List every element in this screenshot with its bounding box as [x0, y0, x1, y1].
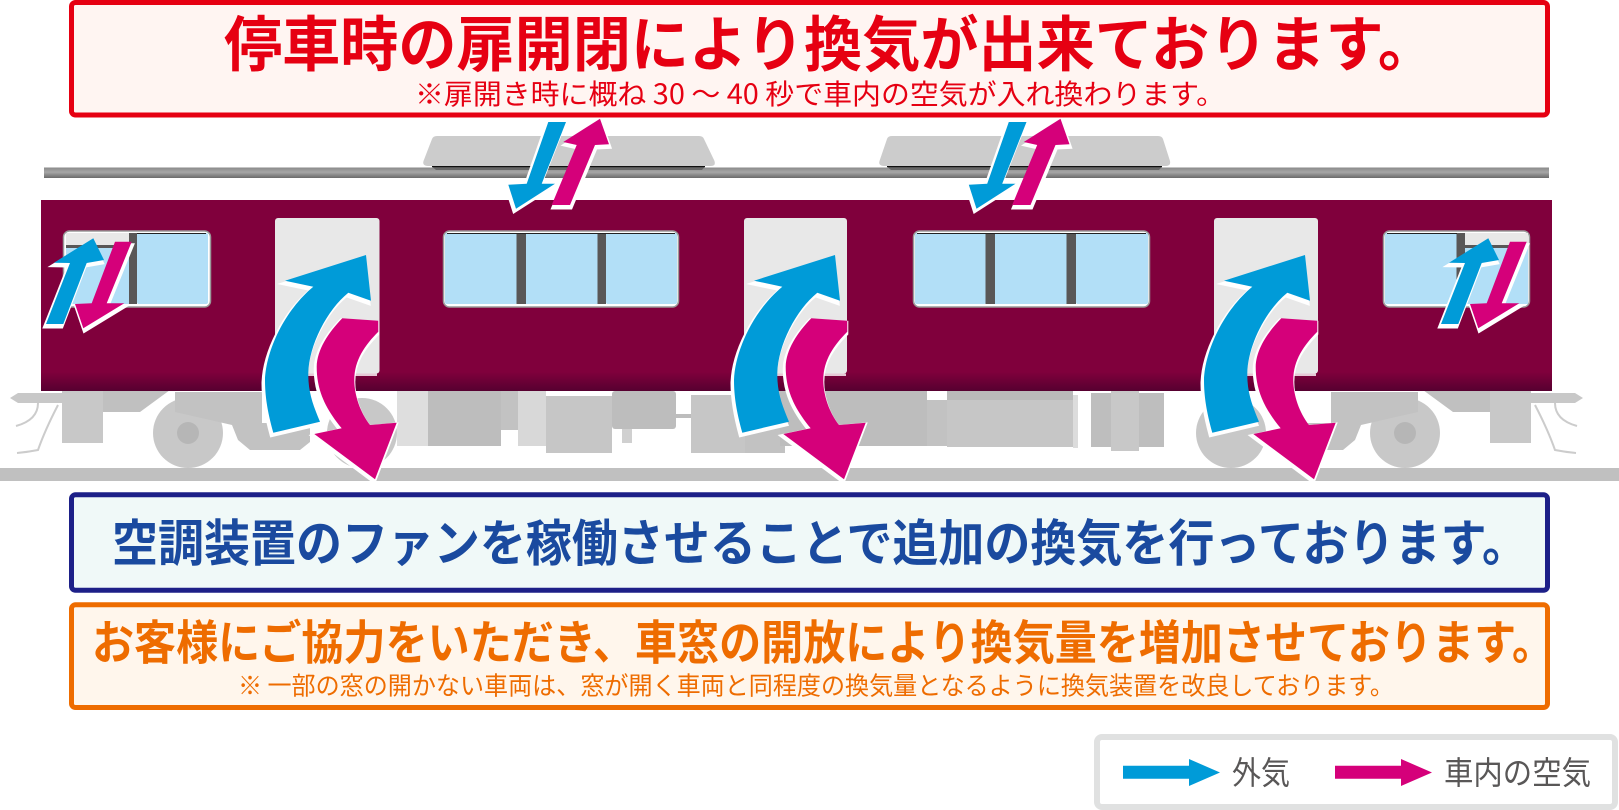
window right (one pane open) — [1384, 231, 1530, 307]
panel: door ventilation (red) — [72, 0, 1548, 115]
arrows: right window — [1440, 238, 1528, 331]
legend: outside air arrow — [1123, 759, 1220, 786]
legend: indoor air arrow — [1335, 759, 1432, 786]
door 2 — [744, 218, 847, 376]
panel: window opening (orange) — [72, 604, 1554, 708]
arrows: door 3 air exchange — [1202, 255, 1336, 481]
panel: air conditioner fan (blue) — [72, 495, 1548, 590]
right bogie — [1196, 390, 1583, 468]
arrows: left window — [44, 238, 133, 331]
air conditioner unit right — [879, 136, 1170, 170]
window centre right — [914, 231, 1150, 307]
arrows: door 2 air exchange — [732, 255, 866, 481]
red note: ※扉開き時に概ね 30 ～ 40 秒で車内の空気が入れ換わります。 — [415, 73, 1225, 113]
arrows: roof vent left — [506, 119, 610, 212]
window centre left — [444, 231, 678, 307]
rail — [0, 468, 1619, 481]
air conditioner unit left — [423, 136, 715, 170]
arrows: roof vent right — [967, 119, 1070, 212]
car body — [41, 200, 1552, 391]
blue heading: 空調装置のファンを稼働させることで追加の換気を行っております。 — [112, 504, 1528, 576]
legend: outside air label: 外気 — [1232, 748, 1290, 794]
arrows: door 1 air exchange — [263, 255, 397, 481]
window left (one pane open) — [64, 231, 210, 307]
orange note: ※ 一部の窓の開かない車両は、窓が開く車両と同程度の換気量となるように換気装置を改良しております。 — [238, 666, 1394, 702]
left bogie — [10, 390, 397, 468]
underfloor equipment — [397, 391, 1164, 453]
door 3 — [1214, 218, 1318, 376]
legend — [1097, 737, 1615, 807]
door 1 — [275, 218, 380, 376]
undercarriage — [10, 390, 1583, 468]
legend: indoor air label: 車内の空気 — [1444, 748, 1591, 794]
roof base strip — [44, 168, 1549, 178]
